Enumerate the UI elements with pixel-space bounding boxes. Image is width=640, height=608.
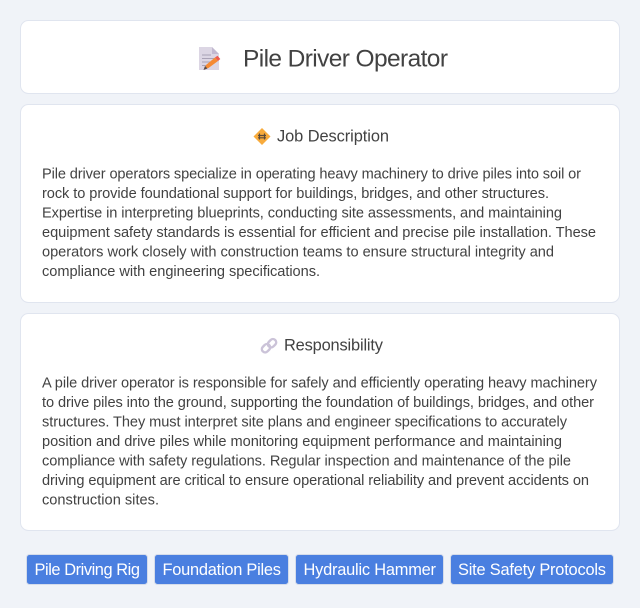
tag: hydraulic hammer bbox=[296, 554, 444, 584]
text block: responsibility: driving equipment are critical to ensure operational reliability and prevent accidents on bbox=[42, 473, 589, 489]
panel: responsibility bbox=[20, 314, 620, 530]
text block: job description: operators work closely with construction teams to ensure structural integrity and bbox=[42, 244, 554, 260]
text block: job description: compliance with engineering specifications. bbox=[42, 264, 320, 280]
text block: job description: Pile driver operators specialize in operating heavy machinery to drive piles into soil or bbox=[42, 166, 581, 182]
heading: responsibility: Responsibility bbox=[284, 336, 384, 354]
title: Pile Driver Operator bbox=[243, 46, 448, 72]
tag: site safety protocols bbox=[450, 554, 614, 584]
tag: pile driving rig bbox=[26, 554, 148, 584]
text block: responsibility: position and drive piles while monitoring equipment performance and maintaining bbox=[42, 434, 562, 450]
tag: hydraulic hammer: Hydraulic Hammer bbox=[304, 561, 437, 579]
tag: pile driving rig: Pile Driving Rig bbox=[34, 561, 140, 579]
text block: job description bbox=[42, 166, 596, 280]
tag: foundation piles: Foundation Piles bbox=[162, 561, 281, 579]
icon: construction diamond sign bbox=[254, 128, 270, 145]
text block: responsibility: structures. They must interpret site plans and engineer specifications to accurately bbox=[42, 414, 568, 430]
text block: job description: equipment safety standards is essential for efficient and precise pile installation. These bbox=[42, 225, 596, 241]
text block: job description: Expertise in interpreting blueprints, conducting site assessments, and maintaining bbox=[42, 206, 562, 222]
heading: job description: Job Description bbox=[277, 128, 389, 146]
icon: chain link bbox=[261, 338, 278, 354]
text block: responsibility: compliance with safety regulations. Regular inspection and maintenance of the pile bbox=[42, 454, 571, 470]
tag: site safety protocols: Site Safety Protocols bbox=[458, 561, 606, 579]
icon: document with pencil bbox=[199, 47, 220, 70]
text block: job description: rock to provide foundational support for buildings, bridges, and other structures. bbox=[42, 186, 549, 202]
text block: responsibility: A pile driver operator is responsible for safely and efficiently operating heavy machinery bbox=[42, 376, 598, 392]
panel: title header bbox=[20, 20, 620, 94]
text block: responsibility: construction sites. bbox=[42, 492, 159, 508]
text block: responsibility bbox=[42, 376, 598, 508]
text block: responsibility: to drive piles into the ground, supporting the foundation of buildings, bridges, and other bbox=[42, 395, 594, 411]
tag: foundation piles bbox=[154, 554, 288, 584]
panel: job description bbox=[20, 104, 620, 302]
